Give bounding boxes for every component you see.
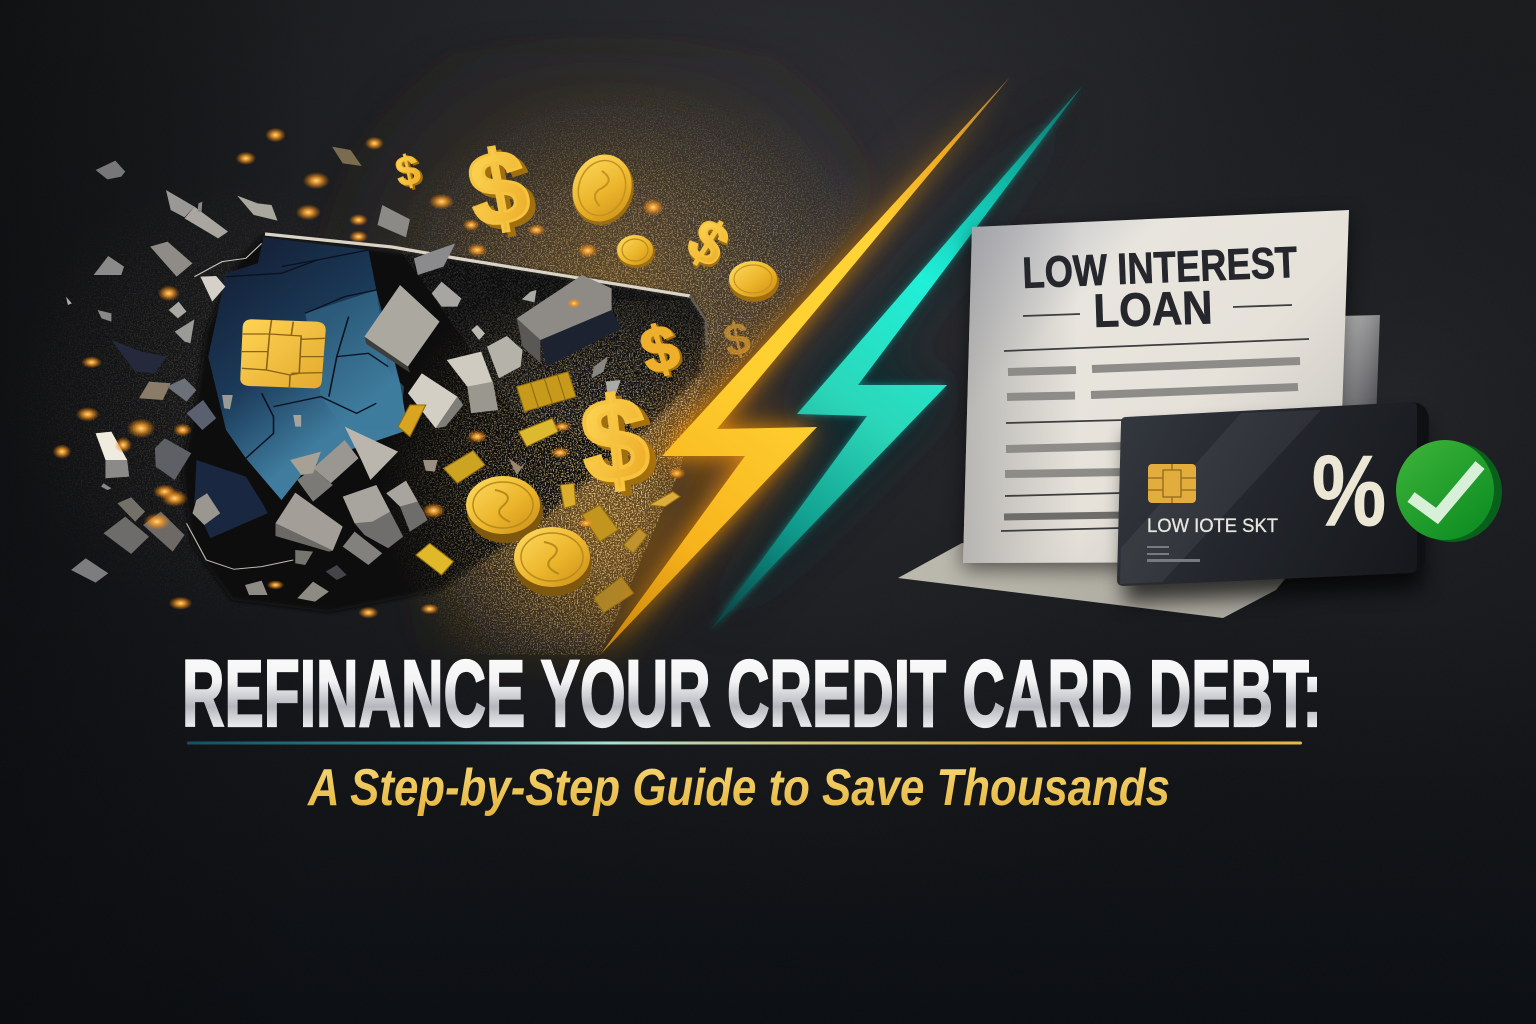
dollar signs: $ bbox=[391, 145, 424, 196]
small card lines bbox=[1147, 546, 1200, 562]
warm dust glow behind the shattered card bbox=[0, 50, 1000, 655]
card label: LOW IOTE SKT bbox=[1147, 516, 1278, 537]
icon: gold EMV chip bbox=[240, 319, 326, 388]
gold dust over the card's lower right bbox=[380, 300, 720, 655]
icon: card chip bbox=[1148, 464, 1196, 503]
bottom paper sheet bbox=[898, 543, 1300, 618]
dollar signs: $ bbox=[719, 311, 755, 367]
dollar signs bbox=[391, 126, 755, 515]
document heading: LOW INTEREST bbox=[1021, 238, 1298, 298]
lightning bolt glows bbox=[586, 77, 1083, 655]
subtitle: A Step-by-Step Guide to Save Thousands bbox=[306, 759, 1170, 817]
diagonal sheen bbox=[1120, 410, 1321, 584]
back paper bbox=[1340, 315, 1380, 420]
blue card fragments and chip bbox=[187, 237, 408, 569]
dollar signs: $ bbox=[394, 147, 426, 197]
dollar signs: $ bbox=[633, 310, 686, 388]
dollar signs: $ bbox=[466, 131, 543, 255]
dollar signs: $ bbox=[676, 205, 740, 280]
dollar signs: $ bbox=[575, 372, 654, 510]
dollar signs: $ bbox=[582, 376, 661, 514]
icon: green check badge bbox=[1396, 440, 1502, 542]
title divider bbox=[187, 742, 1302, 744]
low rate credit card bbox=[1117, 402, 1429, 603]
shattered black credit card body bbox=[182, 234, 720, 655]
teal lightning bolt bbox=[710, 85, 1083, 631]
dollar signs: $ bbox=[636, 311, 689, 390]
card edge bbox=[1410, 402, 1429, 573]
gold coins bbox=[466, 146, 779, 596]
document subheading: LOAN bbox=[1093, 280, 1213, 337]
dollar signs: $ bbox=[677, 208, 741, 283]
card face bbox=[1117, 402, 1417, 586]
gold bars bbox=[398, 372, 680, 613]
front paper page bbox=[963, 210, 1349, 563]
dollar signs: $ bbox=[460, 127, 537, 251]
glowing sparks bbox=[52, 128, 686, 619]
low interest loan document bbox=[898, 210, 1380, 618]
percent symbol: % bbox=[1312, 435, 1386, 547]
flying card shards bbox=[66, 147, 621, 602]
gold lightning bolt bbox=[600, 77, 1010, 655]
